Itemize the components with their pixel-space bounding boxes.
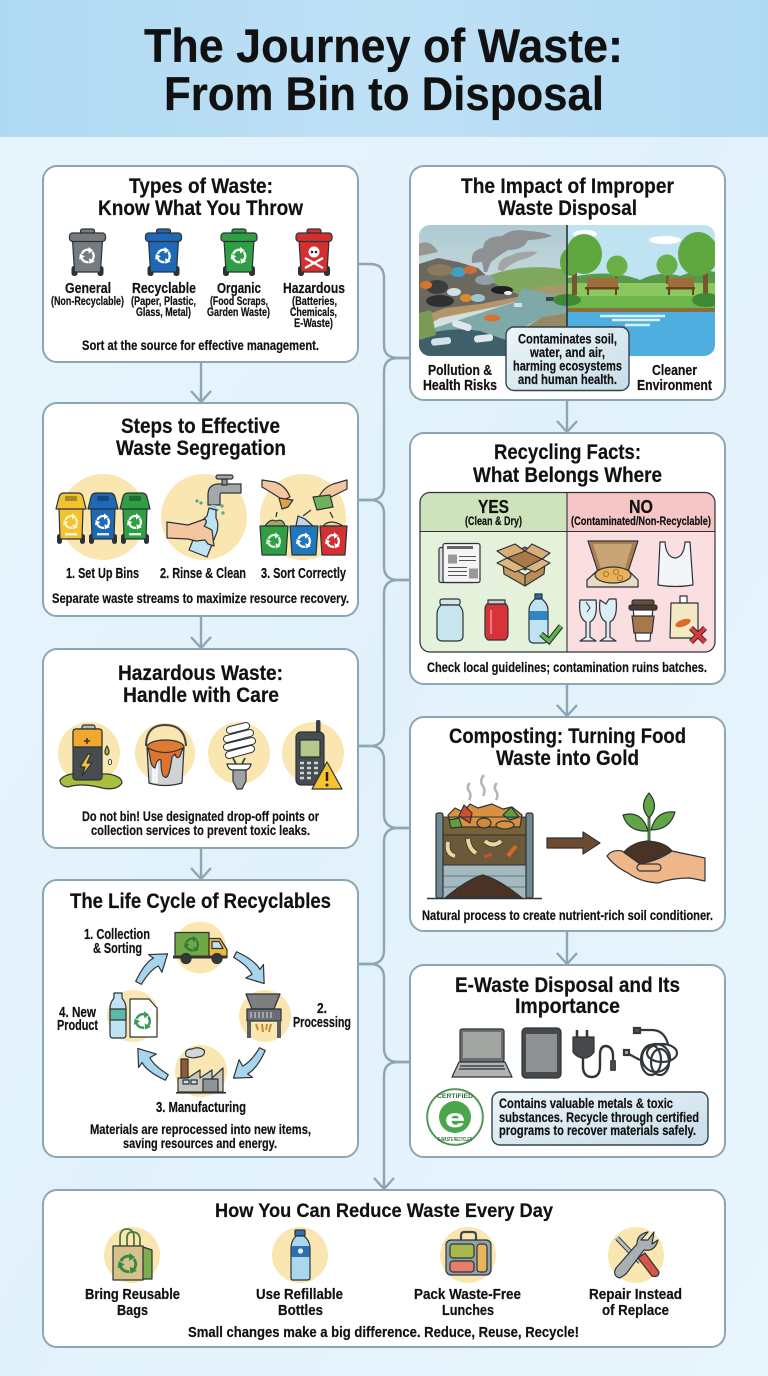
heading: composting: Composting: Turning Food [449,724,686,748]
labels: cycle stages: 2. [317,1001,327,1017]
icon: broken wine glasses [580,599,616,641]
icon: soda can [485,600,508,640]
labels: cycle stages [57,927,351,1116]
heading: impact: The Impact of Improper [461,174,675,198]
label: pollution and health risks: Pollution & [428,363,492,379]
icon: reusable bag [104,1227,160,1283]
caption: sort at source: Sort at the source for effective management. [82,338,319,353]
icon: hand with seedling [607,793,705,883]
callout: contaminates soil, water and air: harming ecosystems [513,358,622,374]
labels: waste types: (Paper, Plastic, [131,296,196,308]
labels: waste types: Hazardous [283,281,345,297]
labels: reduction tips: Use Refillable [256,1287,343,1303]
labels: three steps: 1. Set Up Bins [66,566,139,582]
callout: contaminates soil, water and air: water, and air, [529,345,605,360]
heading: hazardous waste: Hazardous Waste: [118,661,283,685]
icon: three bins [56,474,150,560]
panel: types of waste [43,166,358,362]
icon: tablet [522,1028,561,1078]
icon: certified e-waste badge: E-WASTE RECYCLER [438,1137,472,1143]
heading: segregation [116,414,286,460]
heading: types of waste: Types of Waste: [129,174,273,198]
caption: do not bin [82,809,320,838]
heading: composting: Waste into Gold [496,746,639,770]
caption: small changes: Small changes make a big difference. Reduce, Reuse, Recycle! [188,1324,579,1341]
icon: wrench and screwdriver [608,1227,664,1283]
heading: recycling facts: What Belongs Where [473,463,662,487]
heading: e-waste: E-Waste Disposal and Its [455,973,680,997]
icon: new bottle and paper [107,990,159,1042]
yes column heading: (Clean & Dry) [465,516,522,528]
labels: cycle stages: 3. Manufacturing [156,1100,246,1116]
heading: composting [449,724,686,770]
callout: valuable metals and toxic substances: Contains valuable metals & toxic [499,1096,673,1111]
label: pollution and health risks [423,363,497,394]
icon: paint can [135,723,195,786]
icon: red hazardous bin [296,229,332,276]
labels: cycle stages: Processing [293,1015,351,1031]
labels: waste types: Chemicals, [290,307,337,319]
label: cleaner environment: Environment [637,378,712,394]
no column heading [571,497,711,528]
icon: CFL bulb [208,722,270,789]
caption: reprocessed materials: Materials are reprocessed into new items, [90,1122,311,1137]
icon: glass jar [437,599,463,641]
callout: valuable metals and toxic substances [492,1092,708,1145]
icon: compost bin [427,775,542,898]
cycle arrows [129,945,273,1087]
icon: grey general bin [70,229,106,276]
icon: green organic bin [221,229,257,276]
labels: waste types: Glass, Metal) [136,307,191,319]
labels: cycle stages: 4. New [59,1005,97,1021]
icon: factory [175,1045,227,1097]
labels: waste types: E-Waste) [294,318,333,330]
icon: old mobile phone with warning [282,720,344,789]
callout: contaminates soil, water and air: Contaminates soil, [518,332,617,346]
icon: certified e-waste badge [427,1089,483,1145]
icon: recycling truck [173,922,227,974]
panel: impact of improper disposal [410,166,725,400]
icon: plastic bag [658,542,693,586]
icon: food pouch with cross [670,596,705,642]
heading: recycling facts: Recycling Facts: [494,440,641,464]
caption: natural process: Natural process to create nutrient-rich soil conditioner. [422,908,713,923]
caption: do not bin: collection services to prevent toxic leaks. [91,823,310,838]
label: cleaner environment: Cleaner [652,363,697,379]
heading: e-waste [455,973,680,1018]
icon: cardboard box [497,544,550,586]
labels: reduction tips: of Replace [602,1303,669,1319]
labels: cycle stages: Product [57,1018,98,1034]
labels: waste types: General [65,281,111,297]
panel: recycling facts [410,433,725,684]
panel: waste segregation steps [43,403,358,616]
panel: life cycle of recyclables [43,880,358,1157]
header banner with title: The Journey of Waste: [144,19,623,72]
label: cleaner environment [637,363,712,394]
labels: waste types: (Batteries, [292,296,337,308]
icon: greasy pizza box [587,541,638,587]
heading: recycling facts [473,440,662,487]
labels: waste types: Recyclable [132,281,196,297]
icon: certified e-waste badge: CERTIFIED [437,1094,474,1100]
heading: life cycle: The Life Cycle of Recyclables [70,889,331,913]
icon: plastic bottle with check [529,594,561,643]
header banner with title: From Bin to Disposal [164,67,604,120]
yes column heading [465,497,522,528]
panel: hazardous waste [43,649,358,848]
labels: reduction tips: Bring Reusable [85,1287,180,1303]
labels: waste types [51,281,345,330]
heading: segregation: Steps to Effective [121,414,280,438]
icon: leaking battery [58,722,122,789]
icon: shredder [239,990,291,1042]
icon: laptop [452,1029,512,1077]
labels: three steps [66,566,346,582]
arrow: compost to soil [547,832,600,854]
icon: tangled cable [624,1028,677,1075]
caption: separate streams: Separate waste streams to maximize resource recovery. [52,591,349,606]
caption: check local guidelines: Check local guidelines; contamination ruins batches. [427,660,707,675]
icon: waste-free lunchbox [440,1227,496,1283]
heading: hazardous waste [118,661,283,707]
heading: segregation: Waste Segregation [116,436,286,460]
icon: blue recyclable bin [146,229,182,276]
labels: reduction tips: Repair Instead [589,1287,682,1303]
labels: waste types: (Food Scraps, [210,296,268,308]
no column heading: NO [629,497,653,517]
panel: e-waste [410,965,725,1157]
callout: valuable metals and toxic substances: substances. Recycle through certified [499,1110,699,1125]
labels: waste types: Garden Waste) [207,307,270,319]
callout: contaminates soil, water and air [506,327,629,390]
labels: three steps: 2. Rinse & Clean [160,566,246,582]
label: pollution and health risks: Health Risks [423,378,497,394]
yes column heading: YES [478,497,509,517]
labels: waste types: (Non-Recyclable) [51,296,124,308]
labels: reduction tips [85,1287,682,1319]
callout: contaminates soil, water and air: and human health. [518,372,617,387]
flow connectors between panels [191,264,577,1189]
heading: e-waste: Importance [515,994,620,1018]
icon: certified e-waste badge: e [445,1103,465,1133]
panel: reduce waste every day [43,1190,725,1347]
caption: reprocessed materials [90,1122,311,1151]
callout: valuable metals and toxic substances: programs to recover materials safely. [499,1123,696,1138]
labels: reduction tips: Bags [117,1303,148,1319]
icon: sorting trash into bins [260,474,347,560]
labels: cycle stages: & Sorting [93,941,142,957]
labels: reduction tips: Lunches [442,1303,494,1319]
caption: do not bin: Do not bin! Use designated drop-off points or [82,809,320,824]
heading: types of waste: Know What You Throw [98,196,303,220]
icon: newspaper [439,544,480,582]
header banner with title [0,0,768,137]
icon: charger [573,1030,616,1077]
caption: reprocessed materials: saving resources and energy. [123,1136,277,1151]
no column heading: (Contaminated/Non-Recyclable) [571,516,711,528]
icon: coffee cup [629,600,657,641]
labels: three steps: 3. Sort Correctly [261,566,346,582]
labels: reduction tips: Pack Waste-Free [414,1287,521,1303]
heading: impact: Waste Disposal [498,196,637,220]
labels: cycle stages: 1. Collection [84,927,150,943]
illustration: polluted versus clean landscape [419,225,720,356]
table: yes and no items [420,492,715,652]
heading: impact [461,174,675,220]
icon: rinse bottle under tap [161,474,247,560]
labels: waste types: Organic [217,281,261,297]
heading: hazardous waste: Handle with Care [123,683,279,707]
labels: reduction tips: Bottles [278,1303,323,1319]
heading: reduce waste: How You Can Reduce Waste Every Day [215,1200,553,1222]
panel: composting [410,717,725,931]
icon: refillable bottle [272,1227,328,1283]
heading: types of waste [98,174,303,220]
